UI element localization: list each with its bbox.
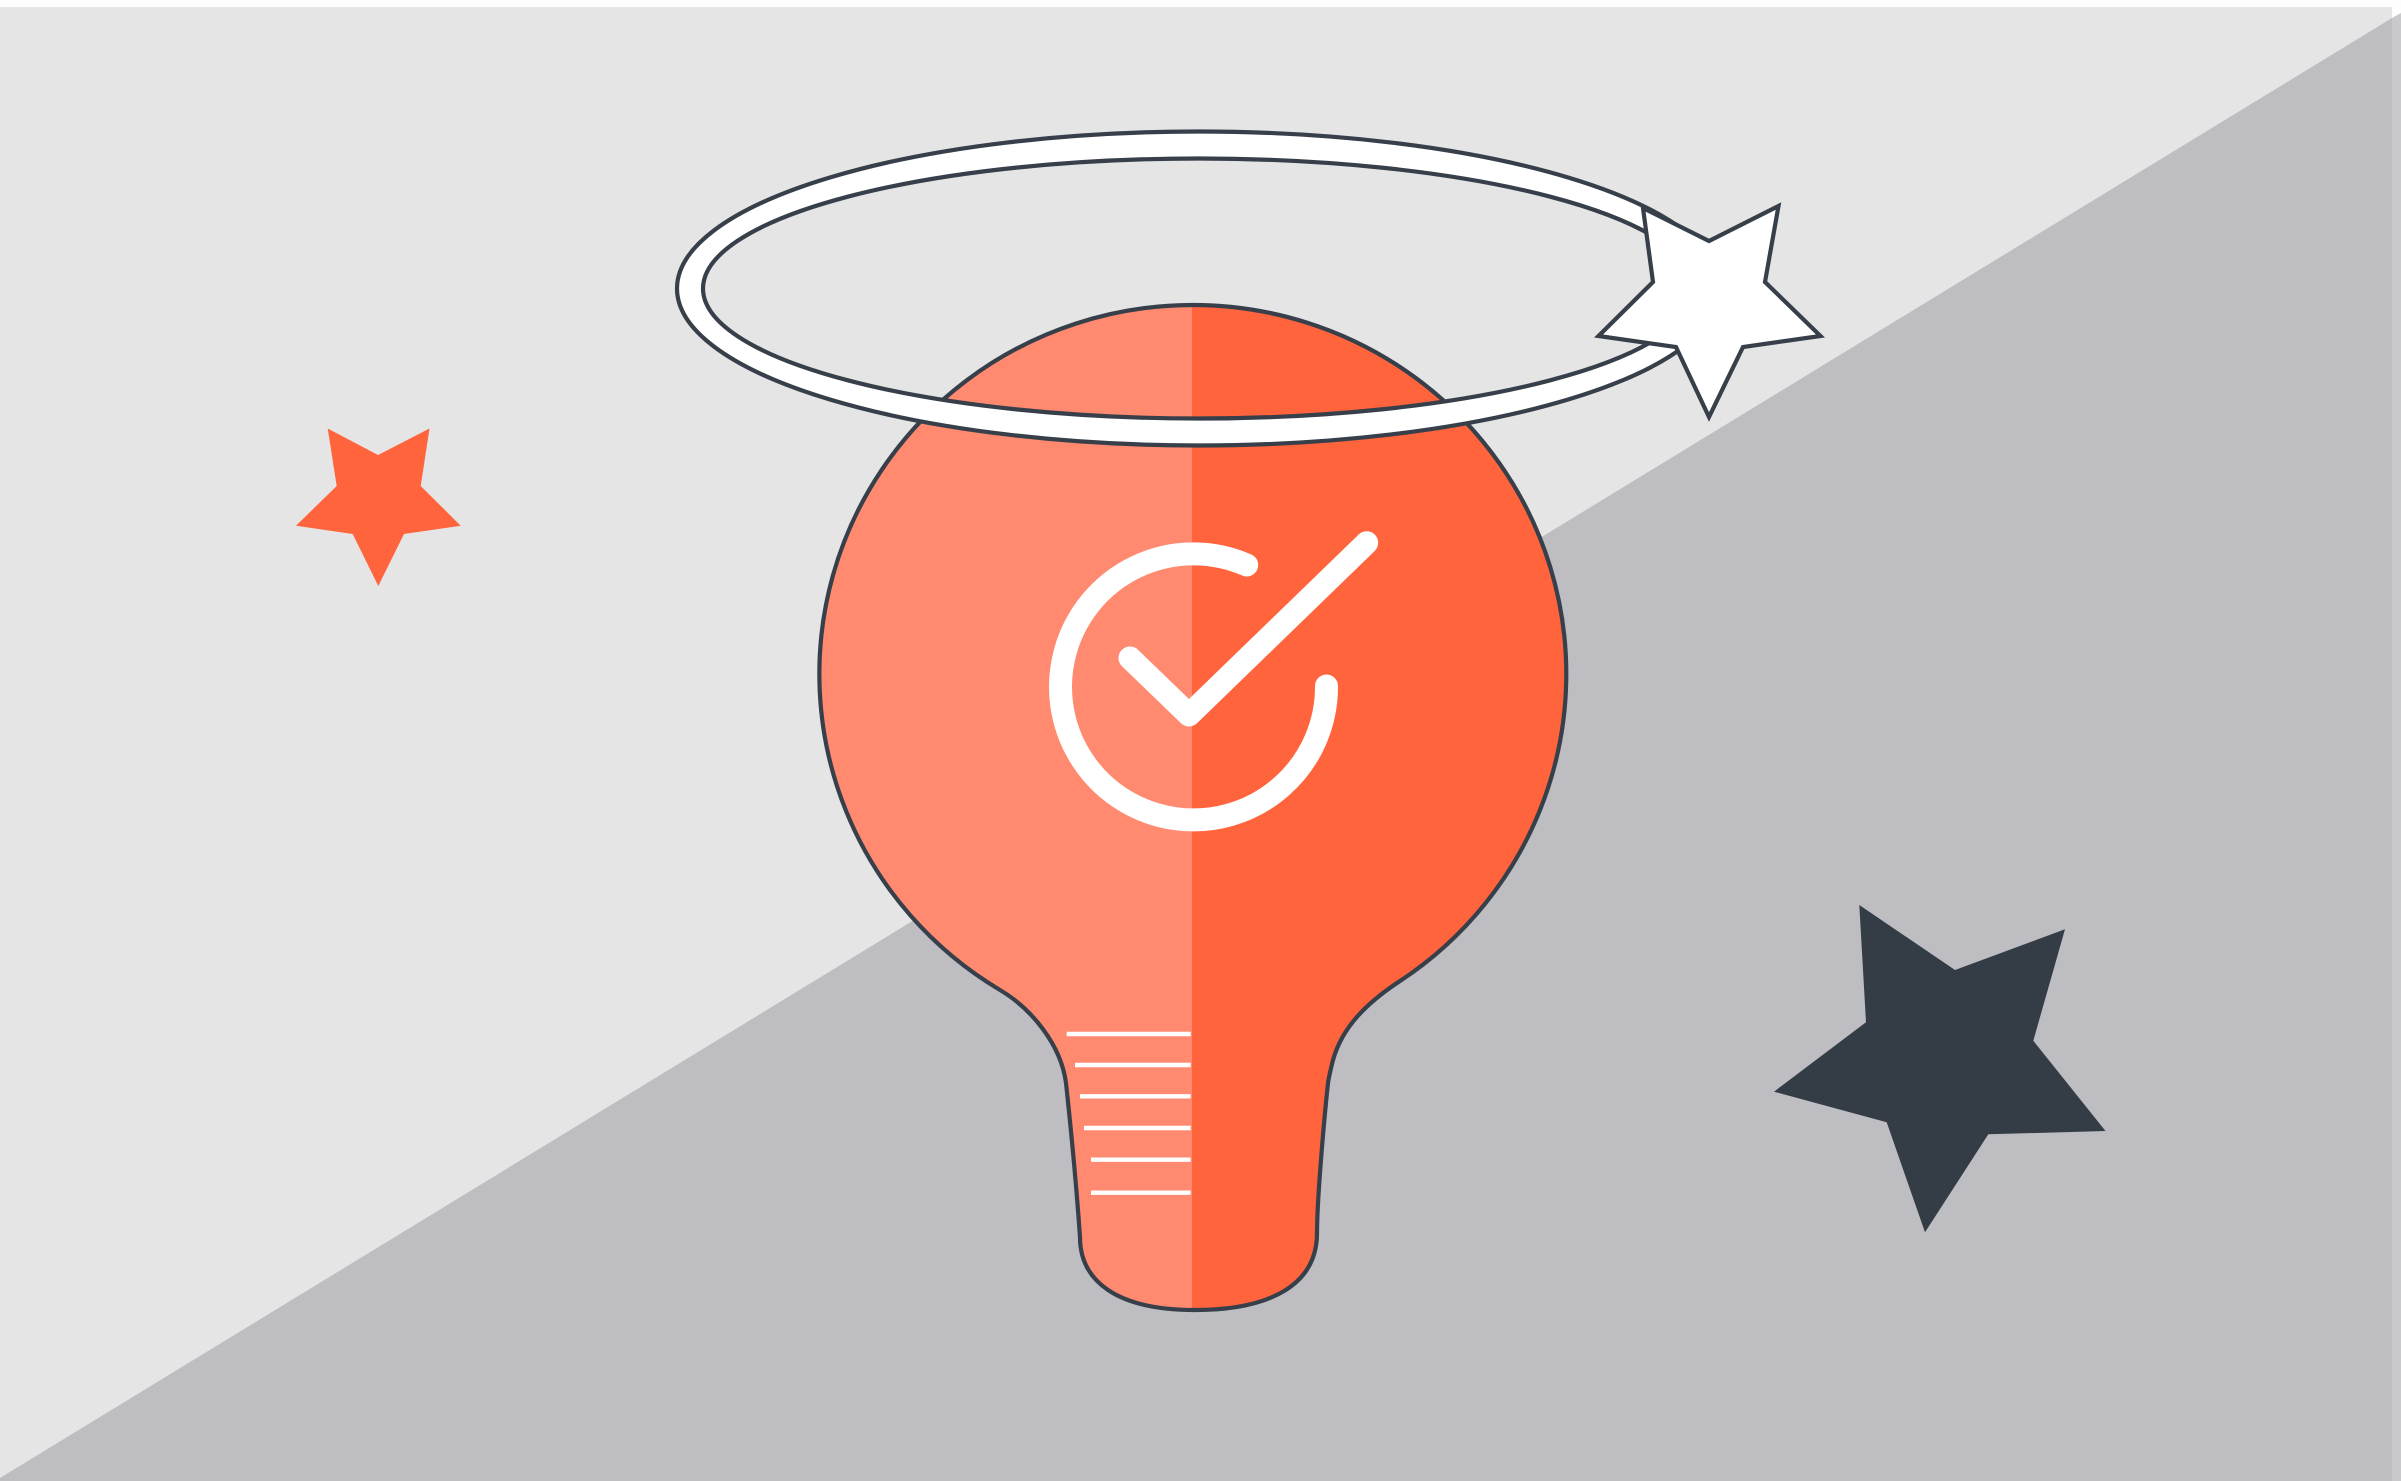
icon: white star on halo — [1598, 206, 1820, 417]
screw thread lines — [1067, 1034, 1191, 1193]
icon: red star — [296, 428, 461, 586]
light bulb — [819, 305, 1566, 1310]
icon: check mark in circle — [1061, 543, 1367, 820]
bulb body: right tone — [819, 305, 1566, 1310]
icon: dark star — [1774, 905, 2106, 1232]
bulb outline — [819, 305, 1566, 1310]
halo ring — [677, 132, 1721, 446]
bulb body: left lighter tone — [822, 307, 1192, 1308]
